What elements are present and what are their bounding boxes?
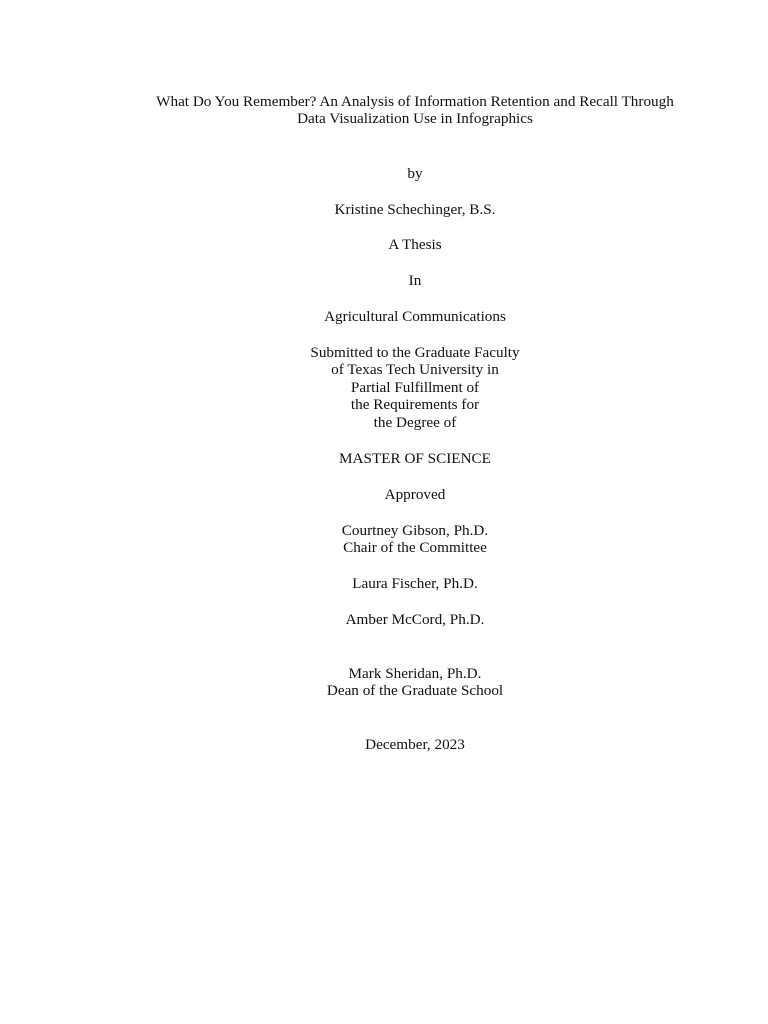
graduate dean: Dean of the Graduate School — [327, 682, 503, 699]
submission statement: the Degree of — [374, 414, 456, 431]
degree: MASTER OF SCIENCE — [339, 450, 491, 467]
byline: by: by — [407, 165, 423, 182]
submission statement: the Requirements for — [351, 396, 479, 413]
title — [156, 93, 674, 127]
committee member: McCord: Amber McCord, Ph.D. — [346, 611, 484, 628]
committee member: Fischer: Laura Fischer, Ph.D. — [352, 575, 478, 592]
text: in: In — [409, 272, 421, 289]
title: Data Visualization Use in Infographics — [297, 110, 533, 127]
committee chair: Chair of the Committee — [343, 539, 487, 556]
graduate dean — [327, 665, 503, 699]
department: Agricultural Communications — [324, 308, 506, 325]
committee chair — [342, 522, 488, 556]
submission statement: of Texas Tech University in — [331, 361, 499, 378]
date: December, 2023 — [365, 736, 465, 753]
submission statement: Submitted to the Graduate Faculty — [310, 344, 520, 361]
committee chair: Courtney Gibson, Ph.D. — [342, 522, 488, 539]
author: Kristine Schechinger, B.S. — [335, 201, 495, 218]
text: approved: Approved — [385, 486, 445, 503]
graduate dean: Mark Sheridan, Ph.D. — [349, 665, 481, 682]
submission statement — [310, 344, 520, 431]
title: What Do You Remember? An Analysis of Information Retention and Recall Through — [156, 93, 674, 110]
text: a thesis: A Thesis — [388, 236, 442, 253]
submission statement: Partial Fulfillment of — [351, 379, 479, 396]
